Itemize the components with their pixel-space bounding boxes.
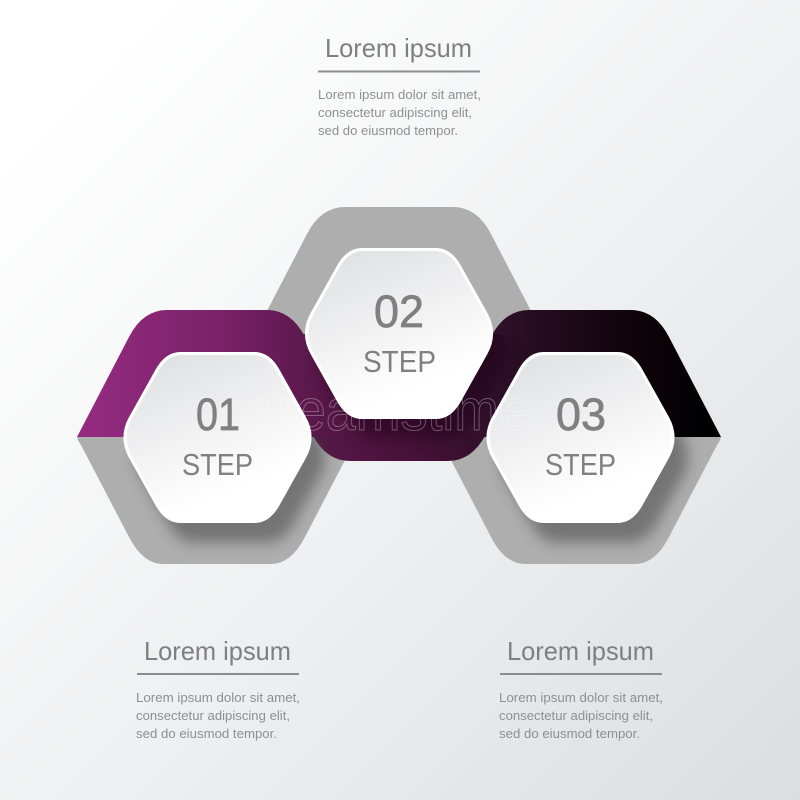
text block: top description: Lorem ipsum [325, 33, 472, 63]
step 02 label [363, 286, 436, 379]
text block: top description: Lorem ipsum dolor sit amet, [318, 88, 481, 102]
text block: top description [318, 33, 481, 138]
step 03 hexagon [486, 352, 675, 523]
text block: bottom right description: consectetur adipiscing elit, [499, 709, 653, 723]
step 03 label: STEP [545, 447, 616, 482]
step 01 label [182, 389, 253, 482]
text block: top description: consectetur adipiscing elit, [318, 106, 472, 120]
text block: bottom right description: Lorem ipsum dolor sit amet, [499, 691, 663, 705]
step 02 label: 02 [374, 286, 424, 337]
step 02 hexagon [305, 248, 493, 419]
shadow: hexagon 3 [494, 437, 695, 550]
text block: bottom left description: consectetur adipiscing elit, [136, 709, 290, 723]
step 01 hexagon [123, 352, 312, 523]
text block: bottom left description: Lorem ipsum [144, 636, 291, 666]
step 03 label [545, 389, 616, 482]
text block: bottom right description: sed do eiusmod tempor. [499, 727, 640, 741]
text block: bottom right description [499, 636, 663, 741]
gray band: hexagon 1 lower half [77, 437, 357, 564]
step 02 label: STEP [363, 344, 436, 379]
text block: bottom left description: Lorem ipsum dolor sit amet, [136, 691, 300, 705]
text block: bottom left description: sed do eiusmod tempor. [136, 727, 277, 741]
text block: bottom right description: Lorem ipsum [507, 636, 654, 666]
shadow: hexagon 1 [130, 437, 332, 550]
text block: top description: sed do eiusmod tempor. [318, 124, 458, 138]
step 03 label: 03 [556, 389, 606, 440]
step 01 label: 01 [196, 389, 240, 440]
step 01 label: STEP [182, 447, 253, 482]
watermark: dreamstime. [248, 378, 544, 443]
gray band: hexagon 2 upper half [255, 207, 543, 334]
purple ribbon [77, 310, 721, 461]
gray band: hexagon 3 lower half [439, 437, 721, 564]
shadow: hexagon 2 [314, 334, 502, 441]
text block: bottom left description [136, 636, 300, 741]
